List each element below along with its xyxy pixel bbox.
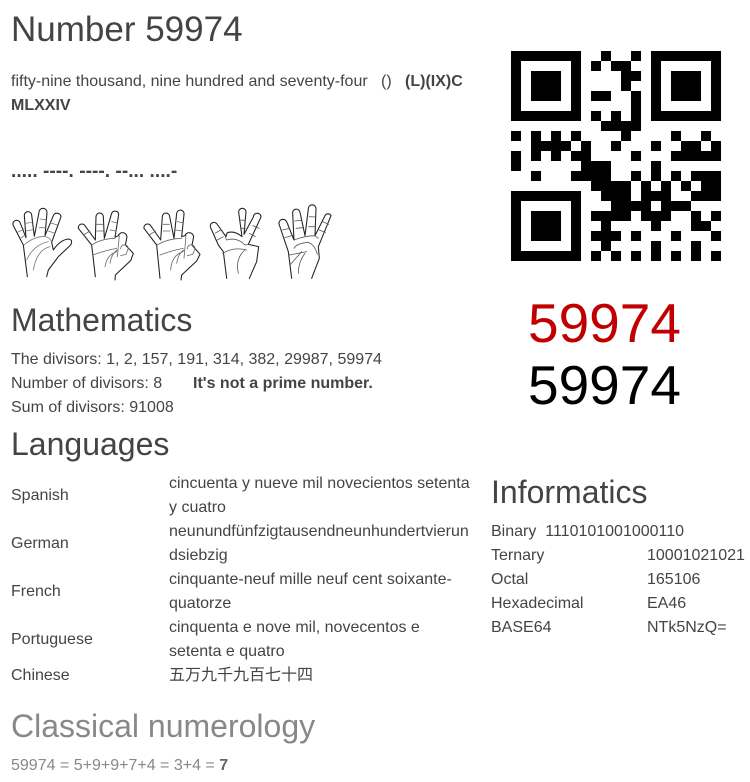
base64 row: BASE64 [491,619,551,636]
hand showing five [13,208,72,277]
German row: German [11,535,69,552]
hand showing nine [78,211,133,280]
base64 row: NTk5NzQ= [647,619,727,636]
mathematics facts: Number of divisors: 8 [11,375,162,392]
numerology sum: 59974 = 5+9+9+7+4 = 3+4 = 7 [11,757,228,774]
Portuguese row: Portuguese [11,631,93,648]
heading: Mathematics: Mathematics [11,302,192,338]
number in black: 59974 [528,354,681,416]
Portuguese row [11,619,420,660]
Portuguese row: setenta e quatro [169,643,285,660]
Chinese row: 五万九千九百七十四 [169,667,313,684]
mathematics facts: The divisors: 1, 2, 157, 191, 314, 382, 29987, 59974 [11,351,382,368]
Chinese row [11,666,313,684]
hexadecimal row: EA46 [647,595,686,612]
number name and roman numeral text: fifty-nine thousand, nine hundred and seventy-four () (L)(IX)C [11,73,463,90]
title: Number 59974 [11,10,243,49]
Spanish row: cincuenta y nueve mil novecientos setenta [169,475,470,492]
hexadecimal row [491,595,686,612]
base64 row [491,619,727,636]
binary row: Binary 1110101001000110 [491,523,684,540]
Portuguese row: cinquenta e nove mil, novecentos e [169,619,420,636]
French row: quatorze [169,595,231,612]
ternary row: 10001021021 [647,547,745,564]
hexadecimal row: Hexadecimal [491,595,583,612]
ternary row: Ternary [491,547,544,564]
data modules [511,51,721,261]
Spanish row: Spanish [11,487,69,504]
hand showing four [279,205,331,278]
number name and roman numeral text [11,73,463,114]
morse code: ..... ----. ----. --... ....- [11,161,177,182]
number in red: 59974 [528,292,681,354]
octal row [491,571,700,588]
German row [11,523,469,564]
mathematics facts [11,351,382,416]
icon: finger-counting hands [12,204,332,280]
Chinese row: Chinese [11,667,70,684]
heading: Languages: Languages [11,426,169,462]
German row: neunundfünfzigtausendneunhundertvierun [169,523,469,540]
Spanish row [11,475,470,516]
French row: French [11,583,61,600]
Spanish row: y cuatro [169,499,226,516]
finder patterns [511,51,721,261]
French row [11,571,452,612]
French row: cinquante-neuf mille neuf cent soixante- [169,571,452,588]
German row: dsiebzig [169,547,228,564]
heading: Classical numerology: Classical numerology [11,708,315,744]
ternary row [491,547,745,564]
QR code [511,51,721,261]
heading: Informatics: Informatics [491,474,647,510]
mathematics facts: It's not a prime number. [193,375,373,392]
octal row: Octal [491,571,528,588]
mathematics facts: Sum of divisors: 91008 [11,399,174,416]
number name and roman numeral text: MLXXIV [11,97,71,114]
languages table [11,475,470,684]
octal row: 165106 [647,571,700,588]
hand showing seven [210,208,261,278]
informatics table [491,523,745,636]
hand showing nine [144,210,200,280]
